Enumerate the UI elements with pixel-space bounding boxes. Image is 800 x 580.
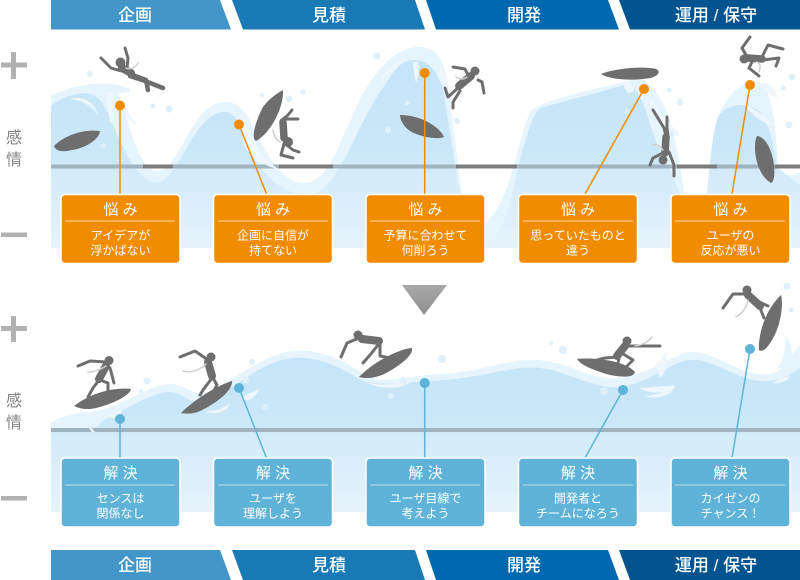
phase: operation xyxy=(619,0,800,30)
surfer 2 falling xyxy=(273,110,299,158)
solution card 5: カイゼンの xyxy=(700,492,761,506)
struggle card 4: 違う xyxy=(566,244,590,258)
baseline xyxy=(51,428,800,432)
struggle card 5 xyxy=(671,194,790,264)
wave body xyxy=(51,60,800,248)
solution card 2: 理解しよう xyxy=(243,506,303,520)
surfboard 3 xyxy=(400,115,444,138)
struggle card 3: 悩 み xyxy=(408,202,443,218)
phase: planning: 企画 xyxy=(118,556,152,575)
solution card 3: 解 決 xyxy=(408,465,443,482)
solution card 5: チャンス！ xyxy=(701,506,760,520)
struggle card 5: 反応が悪い xyxy=(700,242,761,258)
struggle card 2 xyxy=(214,194,332,264)
emotion label, bottom xyxy=(6,392,22,432)
struggle card 4 xyxy=(518,194,638,264)
connector: not as expected xyxy=(585,84,649,194)
struggle card 1: 悩 み xyxy=(103,202,138,218)
spray bubbles xyxy=(87,52,796,148)
phase: planning xyxy=(51,550,231,580)
connector: sense xyxy=(115,414,125,458)
solution card 3: 考えよう xyxy=(401,506,450,520)
solution card 1: センスは xyxy=(97,492,144,506)
solution card 1: 解 決 xyxy=(103,465,138,482)
solution card 3: ユーザ目線で xyxy=(390,490,461,506)
chart: top wave with struggles xyxy=(51,37,800,248)
surfboard 4 xyxy=(601,68,659,80)
surfer 4 riding xyxy=(577,336,660,377)
struggle card 2: 悩 み xyxy=(256,202,290,218)
connector: kaizen xyxy=(732,344,755,458)
struggle card 3: 予算に合わせて xyxy=(383,228,468,242)
surfer 3 riding xyxy=(341,330,412,378)
phase: estimate: 見積 xyxy=(312,6,346,25)
spray bubbles xyxy=(139,282,794,410)
connector: planning confidence xyxy=(234,120,266,194)
struggle card 3 xyxy=(366,194,485,264)
emotion label, bottom: 情 xyxy=(6,414,22,432)
struggle card 2: 持てない xyxy=(249,242,297,258)
phase: planning xyxy=(51,0,231,30)
baseline over white gaps xyxy=(143,164,800,168)
surfer 1 falling xyxy=(101,48,163,90)
plus sign, top xyxy=(1,52,27,79)
minus sign, bottom xyxy=(1,496,27,500)
solution card 5: 解 決 xyxy=(713,465,748,482)
phase: operation: 運用 / 保守 xyxy=(675,6,757,25)
surfer 1 riding xyxy=(74,356,131,409)
phase: development xyxy=(426,0,619,30)
surfboard 2 xyxy=(254,90,283,141)
solution card 4: チームになろう xyxy=(536,506,620,520)
solution card 1: 関係なし xyxy=(96,506,145,520)
solution card 2: ユーザを xyxy=(249,492,297,506)
surfboard 5 xyxy=(755,136,774,183)
solution card 3 xyxy=(366,458,485,527)
struggle card 2: 企画に自信が xyxy=(237,228,309,242)
connector: understand users xyxy=(234,383,266,458)
phase: development: 開発 xyxy=(507,6,541,25)
phase: development: 開発 xyxy=(507,556,541,575)
connector: budget xyxy=(420,68,430,194)
phase: planning: 企画 xyxy=(118,6,152,25)
struggle card 1: アイデアが xyxy=(91,228,150,242)
top phase bar xyxy=(51,0,800,30)
surfer 3 falling xyxy=(445,66,484,108)
solution card 2 xyxy=(214,458,332,527)
phase: operation xyxy=(619,550,800,580)
arrow down xyxy=(402,285,447,315)
phase: estimate xyxy=(232,550,425,580)
surfer 5 riding xyxy=(723,286,782,351)
emotion label, top xyxy=(6,129,22,169)
emotion label, top: 感 xyxy=(6,129,22,147)
solution card 5 xyxy=(671,458,790,527)
struggle card 5: ユーザの xyxy=(707,228,754,242)
connector: idea xyxy=(115,100,125,194)
struggle card 1 xyxy=(61,194,180,264)
foam highlights xyxy=(88,336,792,432)
solution card 2: 解 決 xyxy=(256,465,290,482)
wave body xyxy=(51,358,800,512)
connector: user response xyxy=(732,80,755,194)
phase: estimate: 見積 xyxy=(312,556,346,575)
struggle card 5: 悩 み xyxy=(713,202,748,218)
struggle card 1: 浮かばない xyxy=(90,244,151,258)
foam highlights xyxy=(69,58,778,170)
chart: bottom wave with solutions xyxy=(51,282,800,512)
surfer 4 falling xyxy=(650,110,674,176)
struggle card 4: 悩 み xyxy=(561,202,595,218)
wave foam xyxy=(51,345,800,512)
plus sign, bottom xyxy=(1,316,27,342)
solution card 4: 開発者と xyxy=(554,492,602,506)
connector: user perspective xyxy=(420,378,430,458)
connector: team xyxy=(585,385,628,458)
phase: estimate xyxy=(232,0,425,30)
solution card 4: 解 決 xyxy=(561,465,595,482)
struggle card 3: 何削ろう xyxy=(401,244,450,258)
surfboard 1 xyxy=(54,131,100,151)
emotion label, top: 情 xyxy=(6,151,22,169)
baseline over water xyxy=(51,164,800,168)
wave foam xyxy=(51,47,800,248)
surfer 5 falling xyxy=(740,37,783,76)
bottom phase bar xyxy=(51,550,800,580)
phase: operation: 運用 / 保守 xyxy=(675,556,757,575)
solution card 4 xyxy=(518,458,638,527)
minus sign, top xyxy=(1,232,27,237)
surfer 2 riding xyxy=(180,351,232,414)
solution card 1 xyxy=(61,458,180,527)
phase: development xyxy=(426,550,619,580)
emotion label, bottom: 感 xyxy=(6,392,22,410)
struggle card 4: 思っていたものと xyxy=(530,228,626,242)
